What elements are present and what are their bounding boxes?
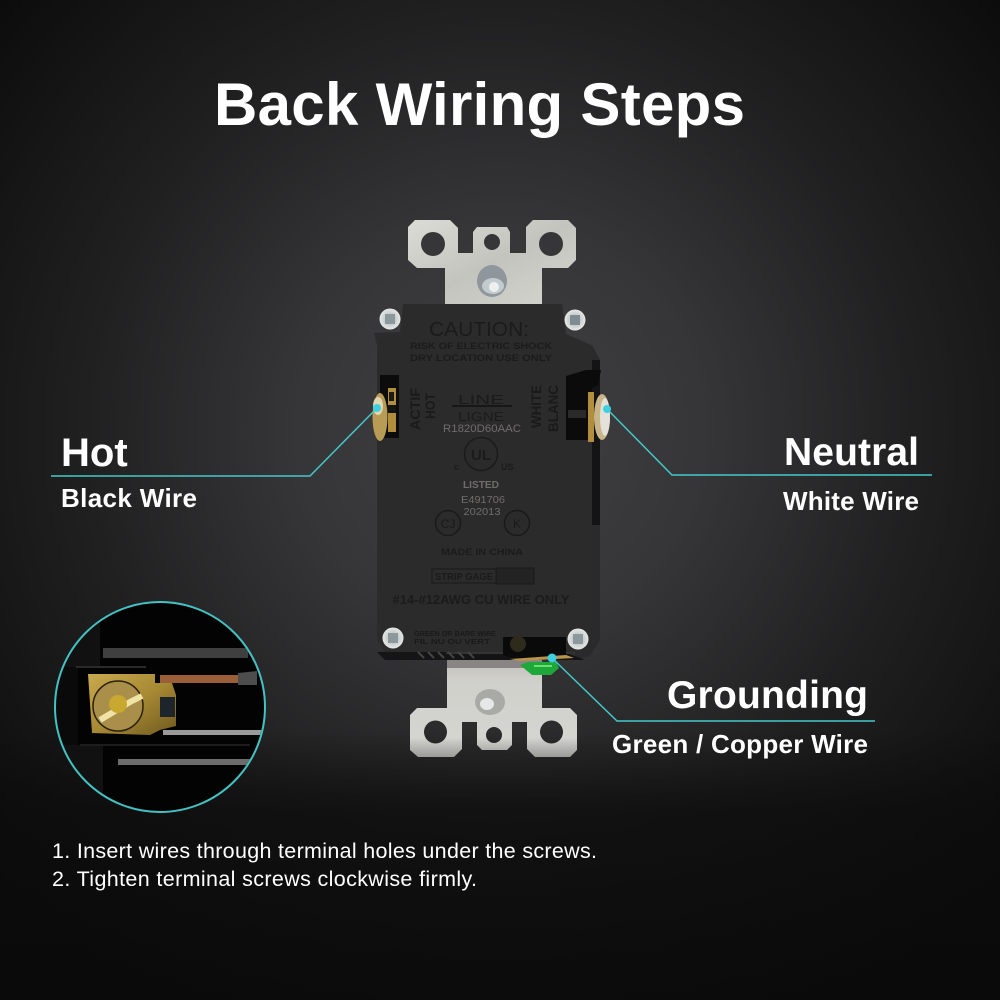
certification marks: K: [513, 517, 521, 531]
instructions: [52, 839, 597, 891]
brass terminal: [88, 674, 176, 735]
side terminal labels: ACTIF: [407, 388, 423, 430]
caution text: CAUTION:: [429, 318, 529, 341]
side terminal labels: [407, 385, 561, 432]
label: neutral: Neutral: [784, 431, 919, 474]
callout: neutral leader line: [603, 405, 932, 475]
label: grounding: Grounding: [667, 674, 868, 717]
title: Back Wiring Steps: [214, 71, 745, 138]
caution text: [392, 318, 570, 607]
instructions: 2. Tighten terminal screws clockwise firmly.: [52, 867, 477, 891]
caution text: #14-#12AWG CU WIRE ONLY: [392, 593, 570, 607]
callout: hot leader line: [51, 404, 381, 476]
back cover: [374, 304, 591, 652]
green grounding screw: [503, 636, 574, 675]
caution text: LINE: [458, 393, 504, 407]
strip gage: STRIP GAGE: [435, 572, 493, 583]
model and listing numbers: R1820D60AAC: [443, 423, 521, 435]
icon: screw top right: [564, 310, 586, 330]
model and listing numbers: LISTED: [463, 480, 499, 491]
label: hot: Hot: [61, 431, 128, 475]
icon: screw bottom right: [568, 628, 588, 650]
inset ring: [55, 602, 265, 812]
grounding note: GREEN OR BARE WIRE: [414, 629, 496, 638]
icon: top plate screw: [477, 265, 507, 297]
model and listing numbers: 202013: [464, 506, 501, 518]
caution text: DRY LOCATION USE ONLY: [410, 353, 553, 364]
left terminal: [372, 375, 399, 441]
label: neutral: White Wire: [783, 486, 919, 516]
caution text: MADE IN CHINA: [441, 547, 523, 558]
caution text: LIGNE: [458, 410, 504, 424]
icon: screw bottom left: [382, 628, 404, 648]
certification marks: CJ: [441, 517, 455, 531]
grounding note: FIL NU OU VERT: [414, 637, 491, 646]
icon: screw top left: [380, 308, 400, 330]
side terminal labels: BLANC: [545, 385, 561, 432]
grounding note: [414, 629, 496, 646]
inset: terminal close-up: [54, 602, 266, 815]
icon: bottom plate screw: [475, 689, 505, 715]
right terminal: [566, 370, 610, 442]
label: grounding: [612, 674, 868, 759]
side housing: [575, 345, 600, 660]
corner screws: [380, 308, 588, 650]
model and listing numbers: E491706: [461, 494, 505, 506]
caution text: RISK OF ELECTRIC SHOCK: [410, 341, 552, 352]
top mounting plate: [408, 220, 576, 306]
copper wire: [160, 675, 238, 683]
UL mark: UL: [471, 447, 491, 464]
UL mark: US: [501, 462, 514, 472]
callout: grounding leader line: [548, 654, 875, 721]
bottom edge ridges: [418, 652, 474, 658]
strip gage: [432, 568, 534, 584]
UL mark: c: [454, 462, 459, 472]
label: hot: [61, 431, 197, 513]
outlet back body: [374, 304, 600, 660]
bottom mounting plate: [410, 660, 577, 757]
label: hot: Black Wire: [61, 483, 197, 513]
side terminal labels: WHITE: [528, 385, 544, 428]
UL mark: [454, 438, 514, 472]
instructions: 1. Insert wires through terminal holes under the screws.: [52, 839, 597, 863]
side terminal labels: HOT: [422, 393, 438, 419]
label: grounding: Green / Copper Wire: [612, 729, 868, 759]
model and listing numbers: [443, 423, 521, 518]
label: neutral: [783, 431, 919, 516]
certification marks: [436, 510, 530, 536]
